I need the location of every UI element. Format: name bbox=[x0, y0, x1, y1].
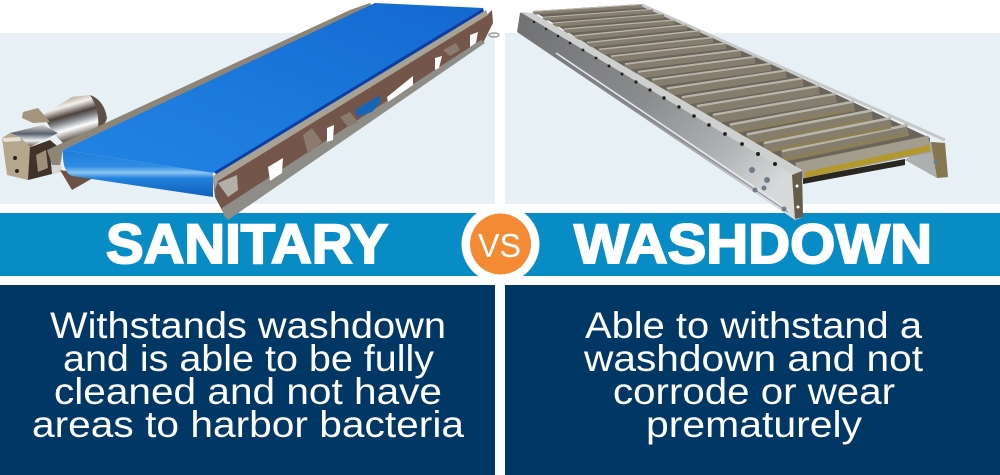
text block: washdown description: washdown and not bbox=[583, 338, 924, 379]
tail ring bbox=[489, 33, 499, 37]
front side plate bbox=[517, 13, 803, 220]
title band: washdown bbox=[505, 213, 1000, 276]
text block: sanitary description: and is able to be fully bbox=[63, 338, 435, 379]
flange bolts bbox=[533, 21, 777, 166]
text block: sanitary description: Withstands washdown bbox=[50, 305, 446, 346]
illustration: washdown roller conveyor bbox=[517, 4, 948, 220]
bracket details bbox=[303, 43, 460, 154]
roller highlights bbox=[533, 4, 908, 151]
top steel lip bbox=[213, 10, 488, 190]
blue slot bbox=[355, 95, 380, 117]
cut-out windows bbox=[268, 32, 478, 181]
front end plate bbox=[792, 171, 803, 219]
motor clamp bbox=[22, 108, 50, 123]
roller gold shading bbox=[730, 110, 908, 160]
text block: washdown description: corrode or wear bbox=[613, 371, 895, 412]
motor neck bbox=[28, 140, 62, 180]
heading: sanitary: SANITARY bbox=[106, 212, 388, 275]
lower plate strip bbox=[556, 53, 790, 212]
yellow roller band bbox=[805, 148, 930, 175]
title band: sanitary bbox=[0, 213, 495, 276]
bolts bbox=[749, 167, 800, 212]
motor cylinder bbox=[43, 95, 107, 143]
bottom lip bbox=[222, 40, 485, 220]
heading: washdown: WASHDOWN bbox=[574, 212, 932, 275]
roller bed bbox=[533, 4, 930, 175]
text block: washdown description: Able to withstand a bbox=[585, 305, 922, 346]
under-frame shadow bbox=[803, 159, 905, 184]
end bolt bbox=[218, 175, 238, 197]
rear rail bbox=[47, 3, 372, 165]
text block: sanitary description: areas to harbor bacteria bbox=[32, 404, 464, 445]
rear rail bbox=[642, 5, 945, 140]
rear end plate bbox=[905, 142, 948, 178]
belt dark edge bbox=[214, 8, 484, 176]
top flange bbox=[520, 12, 802, 176]
text block: sanitary description bbox=[32, 305, 464, 445]
text block: sanitary description: cleaned and not have bbox=[54, 371, 442, 412]
belt front roller bbox=[63, 150, 213, 197]
bracket bbox=[60, 170, 93, 190]
belt surface bbox=[63, 3, 483, 173]
motor gearbox bbox=[2, 125, 58, 180]
panel: sanitary image background bbox=[0, 33, 495, 204]
side plate bbox=[213, 10, 493, 218]
text block: washdown description bbox=[583, 305, 924, 445]
vs label: VS bbox=[478, 227, 521, 264]
illustration: sanitary belt conveyor bbox=[2, 3, 499, 220]
rollers bbox=[533, 4, 930, 175]
vs badge bbox=[462, 205, 540, 283]
text block: washdown description: prematurely bbox=[646, 404, 863, 445]
panel: washdown image background bbox=[505, 33, 1000, 204]
roller stub bbox=[50, 150, 62, 174]
panel: sanitary description background bbox=[0, 285, 495, 475]
panel: washdown description background bbox=[505, 285, 1000, 475]
